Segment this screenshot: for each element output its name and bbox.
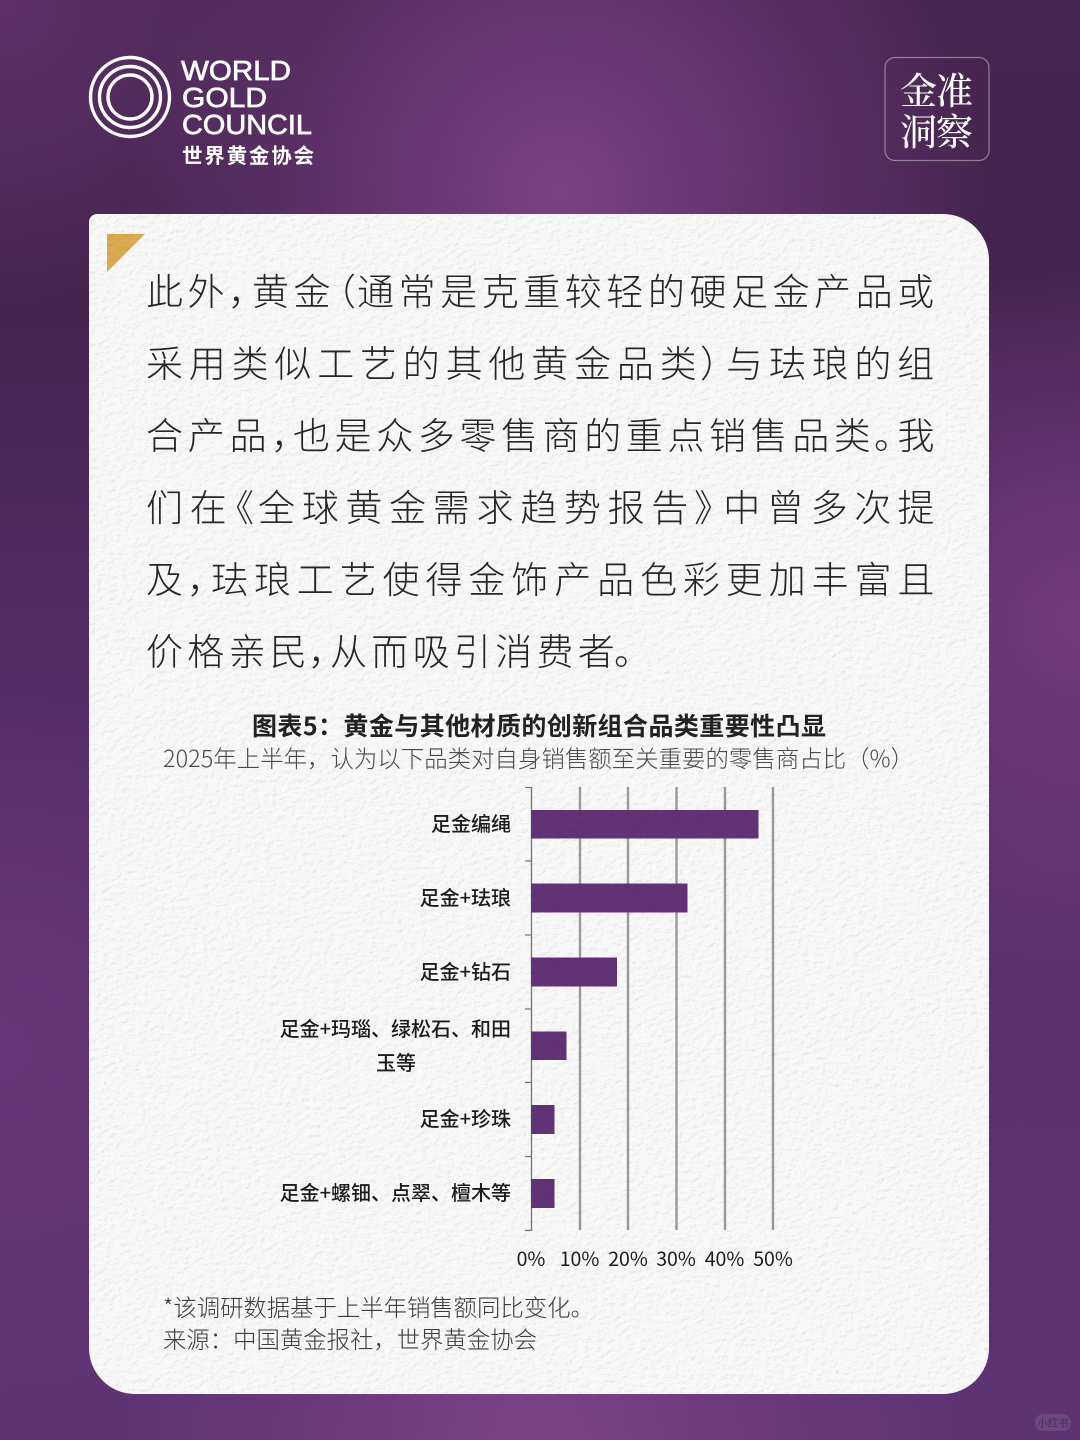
category labels: 足金+珐琅 — [420, 882, 511, 911]
vertical axis — [525, 788, 532, 1230]
axis labels: 30% — [656, 1243, 696, 1272]
bar chart — [280, 787, 793, 1272]
logo wordmark: COUNCIL — [182, 109, 312, 140]
axis labels: 0% — [517, 1243, 545, 1272]
category labels — [280, 808, 511, 1206]
axis labels: 10% — [560, 1243, 599, 1272]
badge: 金准洞察: 洞察 — [900, 102, 973, 156]
bars — [531, 810, 758, 1208]
chart title: 图表5：黄金与其他材质的创新组合品类重要性凸显 — [252, 707, 826, 743]
body paragraph: 采用类似工艺的其他黄金品类）与珐琅的组 — [146, 334, 934, 388]
watermark: 小红书 — [1037, 1416, 1069, 1430]
category labels: 足金+钻石 — [420, 956, 511, 985]
logo wordmark — [181, 55, 312, 140]
logo: World Gold Council — [90, 55, 314, 169]
category labels: 足金+螺钿、点翠、檀木等 — [280, 1177, 511, 1206]
body paragraph: 及，珐琅工艺使得金饰产品色彩更加丰富且 — [146, 550, 934, 604]
panel: paper card — [89, 214, 989, 1394]
grid lines — [580, 787, 773, 1230]
chart subtitle: 2025年上半年，认为以下品类对自身销售额至关重要的零售商占比（%） — [163, 740, 914, 774]
logo wordmark: GOLD — [182, 82, 267, 113]
body paragraph: 此外，黄金（通常是克重较轻的硬足金产品或 — [146, 262, 934, 316]
paper texture overlay — [89, 214, 989, 1394]
category labels: 足金+玛瑙、绿松石、和田 — [280, 1013, 511, 1042]
axis labels: 20% — [608, 1243, 648, 1272]
badge: 金准洞察 — [885, 58, 989, 160]
icon: gold corner triangle — [107, 234, 145, 272]
body paragraph — [146, 262, 934, 676]
icon: concentric rings — [90, 58, 170, 136]
body paragraph: 价格亲民，从而吸引消费者。 — [146, 622, 651, 676]
logo Chinese name: 世界黄金协会 — [182, 139, 314, 169]
axis labels: 50% — [753, 1243, 793, 1272]
footnote and source: 来源：中国黄金报社，世界黄金协会 — [163, 1321, 537, 1355]
category labels: 足金+珍珠 — [420, 1103, 511, 1132]
logo wordmark: WORLD — [181, 55, 291, 86]
axis labels — [517, 1243, 793, 1272]
badge: 金准洞察: 金准 — [900, 61, 973, 115]
footnote and source — [163, 1289, 594, 1355]
category labels: 玉等 — [376, 1047, 416, 1076]
axis labels: 40% — [705, 1243, 744, 1272]
category labels: 足金编绳 — [431, 808, 511, 837]
body paragraph: 们在《全球黄金需求趋势报告》中曾多次提 — [146, 478, 934, 532]
body paragraph: 合产品，也是众多零售商的重点销售品类。我 — [146, 406, 934, 460]
footnote and source: *该调研数据基于上半年销售额同比变化。 — [163, 1289, 594, 1323]
